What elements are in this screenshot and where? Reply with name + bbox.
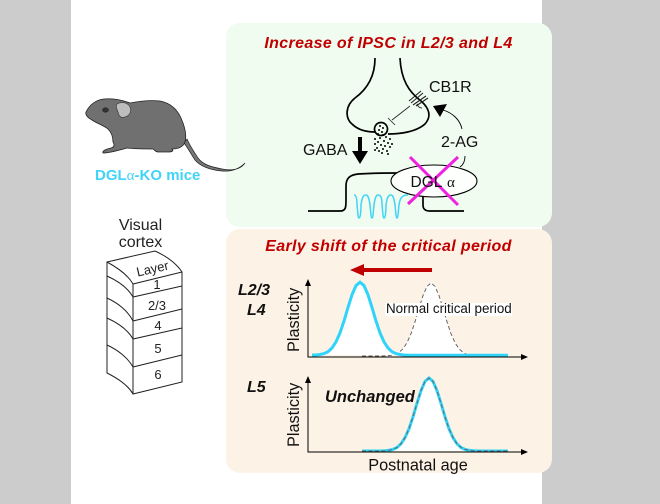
heading: early shift: Early shift of the critical period: [265, 238, 513, 255]
vesicle with GABA dots: [374, 122, 393, 155]
layer labels: 6: [154, 367, 162, 382]
IPSC trace: [354, 195, 408, 218]
panel: critical period shift: [226, 229, 552, 474]
DGL alpha enzyme: [391, 165, 477, 197]
label: L2/3 L4: L4: [247, 302, 266, 319]
KO curve: [362, 378, 508, 451]
label: normal critical period: Normal critical period: [386, 301, 512, 316]
magenta cross: [408, 157, 458, 205]
arrow: GABA release: [352, 137, 368, 164]
eye: [102, 108, 108, 112]
presynaptic terminal: [347, 58, 429, 134]
label: 2-AG: 2-AG: [441, 134, 478, 151]
label: L5: L5: [247, 379, 267, 396]
y label: Plasticity: [285, 382, 303, 447]
label: CB1R: CB1R: [429, 79, 472, 96]
diagram: cortical layers: [107, 251, 182, 394]
CB1R receptor: [388, 91, 428, 125]
label: DGL alpha KO mice: DGLα-KO mice: [95, 167, 200, 184]
layer labels: 5: [154, 341, 162, 356]
heading: increase of IPSC: Increase of IPSC in L2/3 and L4: [264, 35, 513, 52]
y label: Plasticity: [285, 287, 303, 352]
axes: [308, 284, 524, 357]
unchanged curve fill: [379, 378, 479, 451]
label: DGL alpha: DGL: [410, 174, 443, 191]
label: L2/3 L4: [238, 282, 270, 319]
arrow: shift left: [350, 264, 432, 276]
label: DGL alpha: α: [447, 175, 455, 191]
layer labels: [135, 258, 171, 382]
chart: L2/3 and L4 plasticity: [285, 279, 528, 360]
normal period curve: [381, 282, 481, 355]
layer labels: Layer: [135, 258, 171, 280]
icon: mouse: [86, 99, 245, 171]
arrow: 2-AG path: [433, 104, 465, 167]
label: unchanged: Unchanged: [325, 388, 416, 406]
panel: increase of IPSC: [226, 23, 552, 227]
postsynaptic membrane: [308, 173, 464, 211]
label: GABA: GABA: [303, 142, 348, 159]
label: visual cortex: [119, 217, 162, 251]
axes: [308, 381, 524, 452]
ear: [116, 103, 131, 117]
control curve: [362, 378, 508, 451]
layer labels: 4: [154, 318, 162, 333]
layer labels: 1: [153, 277, 161, 292]
label: visual cortex: cortex: [119, 234, 162, 251]
chart: L5 plasticity: [285, 376, 528, 474]
shifted curve: [310, 282, 410, 355]
x label: Postnatal age: [368, 456, 468, 474]
layer labels: 2/3: [148, 298, 166, 313]
label: visual cortex: Visual: [119, 217, 162, 234]
label: L2/3 L4: L2/3: [238, 282, 270, 299]
